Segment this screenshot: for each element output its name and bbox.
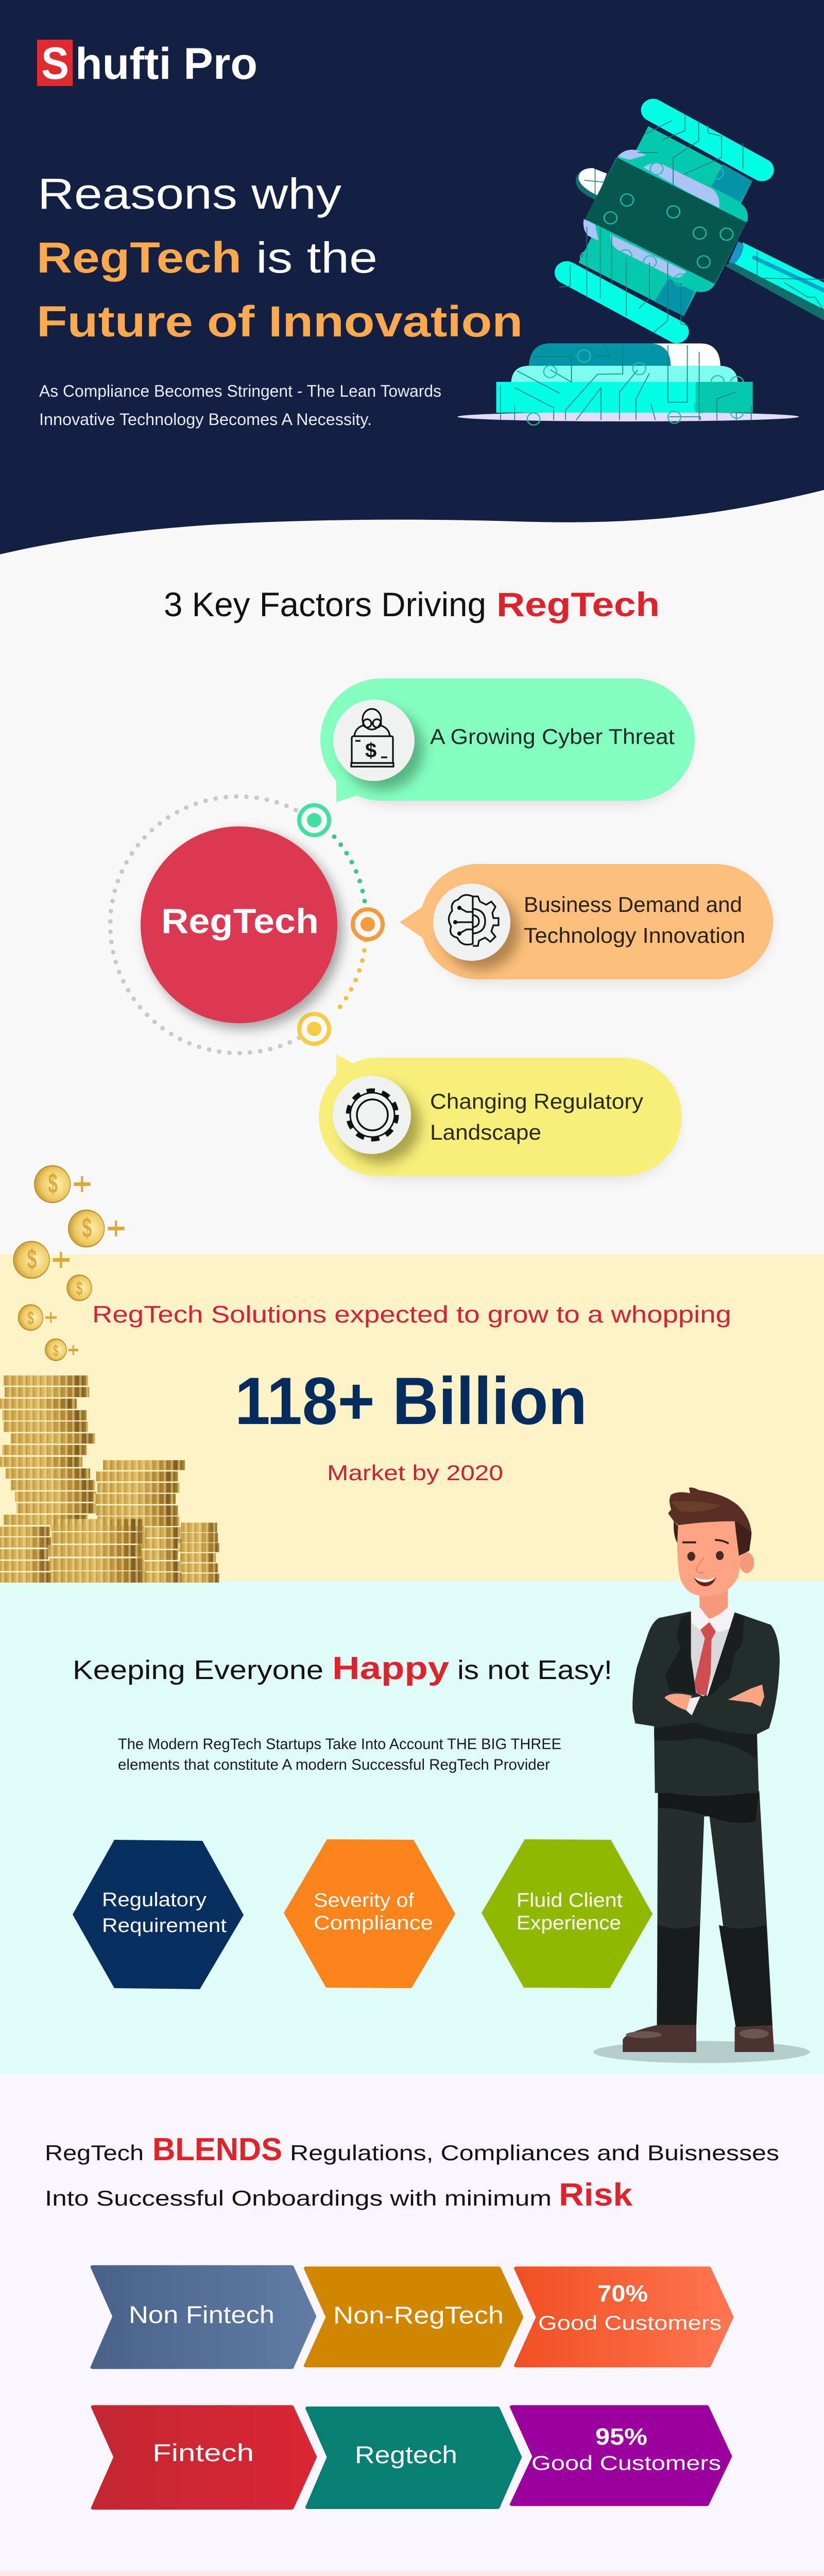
heading: 3 Key Factors: RegTech <box>496 585 660 623</box>
panel: Business Demand <box>400 864 773 984</box>
panel: navy header with wave <box>0 0 824 554</box>
title <box>37 170 523 346</box>
panel: Changing Regulatory Landscape: Changing Regulatory <box>430 1089 643 1113</box>
icon: gear <box>333 1076 411 1154</box>
flow: non-RegTech route: Non Fintech <box>129 2301 274 2328</box>
subtitle: Innovative Technology Becomes A Necessity. <box>39 410 372 429</box>
illustration: businessman legs <box>593 1791 810 2063</box>
hexagon: Regulatory Requirement: Requirement <box>102 1915 227 1937</box>
market size text: RegTech Solutions expected to grow to a whopping <box>92 1301 731 1328</box>
heading: Keeping Everyone Happy <box>73 1651 612 1686</box>
heading: RegTech BLENDS: Risk <box>559 2177 633 2213</box>
heading: RegTech BLENDS: RegTech <box>45 2141 144 2165</box>
text block: the big three: elements that constitute A modern Successful RegTech Provider <box>118 1756 550 1773</box>
flow: non-RegTech route <box>93 2267 731 2367</box>
icon: falling coins: $ <box>76 1278 82 1299</box>
flow: RegTech route: Good Customers <box>531 2452 721 2475</box>
panel: A Growing Cyber Threat <box>320 679 695 805</box>
diagram: dotted ring and nodes <box>110 796 383 1053</box>
text block: the big three <box>118 1736 561 1773</box>
RegTech hub circle <box>141 826 342 1029</box>
heading: RegTech BLENDS: Into Successful Onboardings with minimum <box>45 2186 552 2210</box>
flow: non-RegTech route: 70% <box>597 2280 648 2307</box>
icon: falling coins: $ <box>27 1243 37 1275</box>
flow: non-RegTech route: Good Customers <box>538 2312 722 2334</box>
text block: the big three: The Modern RegTech Startups Take Into Account THE BIG THREE <box>118 1736 561 1753</box>
icon: falling coins: $ <box>27 1308 34 1329</box>
icon: falling coins: $ <box>82 1212 92 1244</box>
title: Future of Innovation <box>37 297 523 346</box>
icon: falling coins: $ <box>53 1342 59 1360</box>
logo: Shufti Pro header: S <box>41 38 69 89</box>
title: RegTech <box>37 233 242 282</box>
hexagon: Severity of Compliance <box>284 1839 455 1988</box>
title: is the <box>256 233 377 282</box>
flow: RegTech route: Regtech <box>355 2441 457 2468</box>
flow: RegTech route <box>94 2407 729 2508</box>
icon: hacker with laptop <box>333 700 415 781</box>
logo: Shufti Pro header: hufti Pro <box>75 39 258 89</box>
heading: 3 Key Factors: 3 Key Factors Driving <box>164 585 486 623</box>
hexagon: Fluid Client Experience <box>482 1839 653 1988</box>
icon: hacker with laptop: $ <box>365 739 376 762</box>
market size text <box>92 1301 731 1485</box>
icon: circuit gavel <box>457 110 824 425</box>
panel: Changing Regulatory Landscape: Landscape <box>430 1120 541 1144</box>
icon: coin stacks <box>0 1376 219 1583</box>
icon: falling coins <box>13 1166 125 1361</box>
heading: Keeping Everyone Happy: Keeping Everyone <box>73 1655 323 1685</box>
heading: 3 Key Factors <box>164 585 660 623</box>
hexagon: Fluid Client Experience: Experience <box>517 1912 621 1934</box>
hexagon: Regulatory Requirement: Regulatory <box>102 1889 207 1911</box>
heading: RegTech BLENDS <box>45 2132 779 2213</box>
heading: RegTech BLENDS: BLENDS <box>152 2132 282 2167</box>
illustration: businessman upper body <box>632 1487 780 1793</box>
panel: Changing Regulatory Landscape <box>319 1054 682 1181</box>
flow: RegTech route: Fintech <box>152 2439 254 2466</box>
panel: A Growing Cyber Threat: A Growing Cyber Threat <box>430 724 675 749</box>
market size text: Market by 2020 <box>327 1461 503 1485</box>
flow: non-RegTech route: Non-RegTech <box>333 2301 504 2329</box>
market size text: 118+ Billion <box>235 1363 587 1438</box>
flow: RegTech route: 95% <box>595 2424 647 2450</box>
icon: falling coins: $ <box>48 1167 58 1199</box>
heading: Keeping Everyone Happy: Happy <box>332 1651 450 1686</box>
icon: brain and gear <box>433 884 510 961</box>
panel: Business Demand: Technology Innovation <box>524 923 745 947</box>
panel: Business Demand: Business Demand and <box>524 892 742 917</box>
subtitle <box>39 382 441 429</box>
title: Reasons why <box>38 170 341 218</box>
hexagon: Severity of Compliance: Severity of <box>314 1890 414 1911</box>
heading: RegTech BLENDS: Regulations, Compliances and Buisnesses <box>290 2141 779 2165</box>
subtitle: As Compliance Becomes Stringent - The Lean Towards <box>39 382 441 400</box>
hexagon: Severity of Compliance: Compliance <box>314 1912 433 1934</box>
heading: Keeping Everyone Happy: is not Easy! <box>457 1655 612 1685</box>
hexagon: Fluid Client Experience: Fluid Client <box>517 1890 623 1911</box>
hexagon: Regulatory Requirement <box>73 1840 244 1989</box>
RegTech hub circle: RegTech <box>161 902 319 941</box>
